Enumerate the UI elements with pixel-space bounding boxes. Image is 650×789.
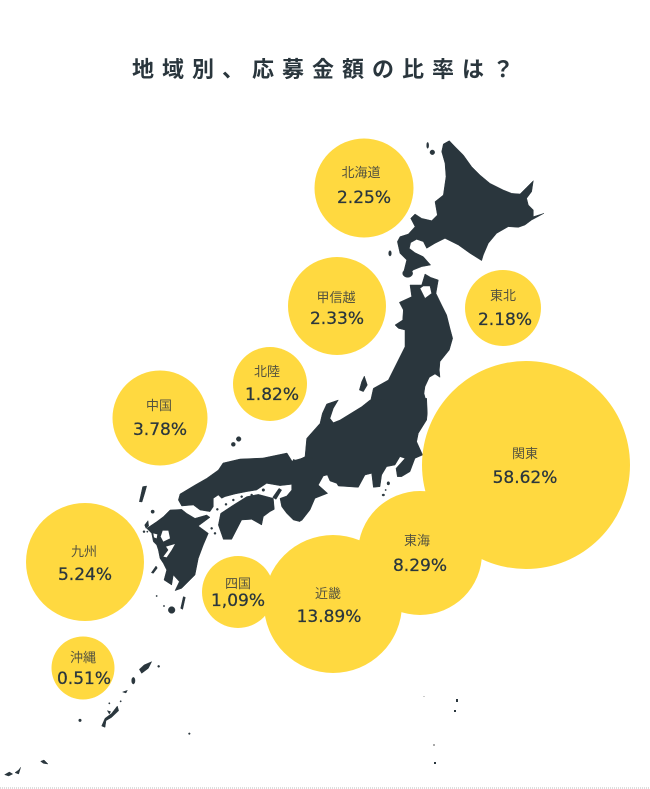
bubble: 中国: 3.78% xyxy=(133,420,187,440)
bubble: 甲信越: 甲信越 xyxy=(316,290,356,305)
bubble: 九州 xyxy=(26,503,144,621)
bubble: 北海道: 2.25% xyxy=(337,188,391,208)
map: Tohoku xyxy=(359,269,453,403)
bubble: 四国: 四国 xyxy=(225,576,251,591)
map: Tsushima and Oki islands xyxy=(139,437,241,502)
bubble: 甲信越 xyxy=(288,257,386,355)
bubble: 東北: 東北 xyxy=(490,288,516,303)
map: Hokkaido xyxy=(389,141,544,277)
map: Shikoku xyxy=(211,494,274,539)
bubble: 北陸 xyxy=(233,347,307,421)
bubble: 沖縄 xyxy=(52,636,114,700)
bubble: 近畿 xyxy=(264,535,402,673)
bubble: 北海道: 北海道 xyxy=(341,165,381,180)
bubble: 北海道 xyxy=(314,138,414,238)
bubble: 九州: 5.24% xyxy=(58,565,112,585)
bubble: 沖縄: 沖縄 xyxy=(70,650,96,665)
bubble: 東海: 東海 xyxy=(404,533,430,548)
bubble: 関東: 関東 xyxy=(512,446,538,461)
bubble: 沖縄: 0.51% xyxy=(57,669,111,689)
map: Chugoku and Kinki xyxy=(178,453,313,522)
map: southern outlying islands xyxy=(423,696,458,764)
map: Kyushu xyxy=(143,509,210,613)
map: Okinawa and Nansei islands xyxy=(5,662,190,776)
bubble: 関東: 58.62% xyxy=(493,468,557,488)
map: Chubu and Kanto xyxy=(293,398,427,521)
bubble: 東北: 2.18% xyxy=(478,310,532,330)
bubble: 中国 xyxy=(112,370,208,466)
bubble: 北陸: 1.82% xyxy=(245,385,299,405)
bubble: 四国: 1,09% xyxy=(211,591,265,611)
bubble: 北陸: 北陸 xyxy=(254,364,280,379)
bubble: 東海: 8.29% xyxy=(393,556,447,576)
bubble: 東北 xyxy=(465,270,541,346)
bubble: 中国: 中国 xyxy=(146,398,172,413)
bubble: 関東 xyxy=(422,361,630,569)
bubble: 近畿: 13.89% xyxy=(297,607,361,627)
bubble: 四国 xyxy=(202,556,274,628)
title: 地域別、応募金額の比率は？ xyxy=(132,57,522,82)
bubble: 九州: 九州 xyxy=(71,544,97,559)
bubble: 近畿: 近畿 xyxy=(315,586,341,601)
bubble: 甲信越: 2.33% xyxy=(310,309,364,329)
map of Japan xyxy=(5,141,544,776)
bubble: 東海 xyxy=(358,491,482,615)
